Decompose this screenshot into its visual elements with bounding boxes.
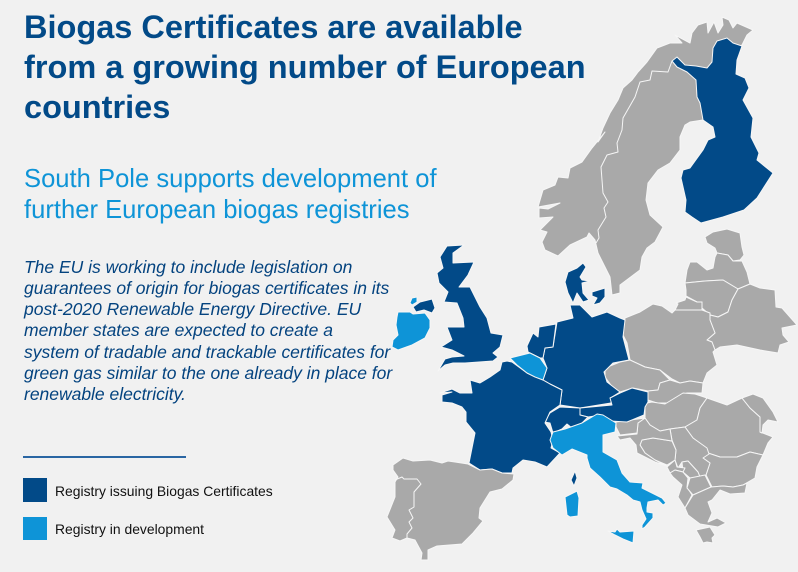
map: Northern Ireland	[413, 299, 435, 313]
title: from a growing number of European	[24, 49, 586, 85]
map: Baltic states, Belarus and eastern Europe	[605, 229, 797, 543]
title: Biogas Certificates are available	[24, 9, 523, 45]
map: United Kingdom	[437, 245, 503, 371]
map: Spain and Portugal	[387, 458, 514, 560]
map: Ireland	[392, 297, 430, 350]
map: France	[440, 361, 562, 473]
map: Switzerland	[544, 407, 588, 433]
subtitle	[24, 165, 437, 224]
map: Belgium	[510, 353, 547, 380]
legend	[23, 478, 273, 540]
map: Germany	[543, 305, 629, 408]
map: Austria	[580, 388, 648, 422]
subtitle: South Pole supports development of	[24, 165, 437, 193]
legend label: in development: Registry in development	[55, 521, 204, 537]
subtitle: further European biogas registries	[24, 196, 410, 224]
legend swatch: issuing	[23, 478, 47, 502]
divider line	[23, 456, 186, 458]
legend label: issuing: Registry issuing Biogas Certificates	[55, 483, 273, 499]
body text: member states are expected to create a	[24, 320, 333, 340]
map: Italy	[550, 414, 666, 543]
title: countries	[24, 89, 170, 125]
body text: green gas similar to the one already in place for	[24, 363, 392, 383]
map: Finland	[672, 38, 773, 223]
body text: post-2020 Renewable Energy Directive. EU	[24, 299, 361, 319]
map: Corsica	[571, 471, 577, 486]
body text	[24, 257, 393, 404]
map: Norway and Sweden	[538, 17, 753, 295]
body text: The EU is working to include legislation on	[24, 257, 352, 277]
map: Netherlands	[527, 324, 556, 358]
body text: renewable electricity.	[24, 384, 186, 404]
title	[24, 9, 586, 125]
legend swatch: in development	[23, 517, 47, 540]
body text: guarantees of origin for biogas certificates in its	[24, 278, 389, 298]
body text: system of tradable and trackable certificates for	[24, 342, 390, 362]
map: Denmark	[565, 263, 605, 305]
